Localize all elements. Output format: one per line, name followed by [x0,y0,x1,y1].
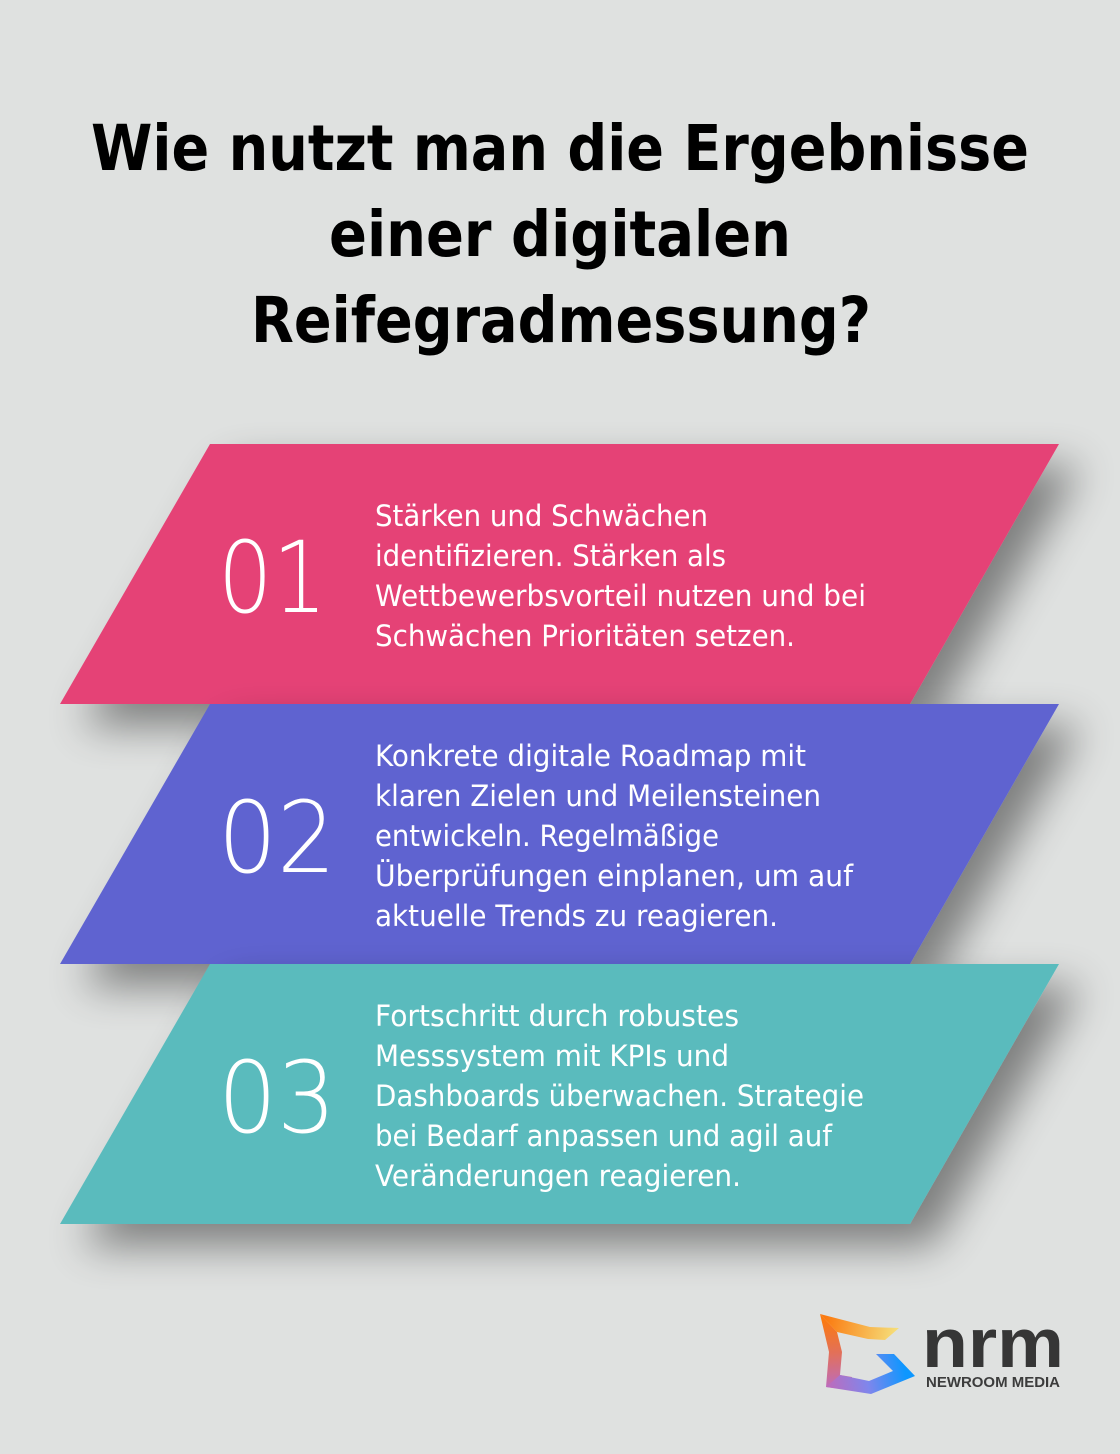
wordmark: nrm: nrm [922,1304,1064,1382]
panel: step 02 [60,704,1059,964]
parallelogram: step 01 [60,444,1059,704]
text block: step 02: entwickeln. Regelmäßige [375,819,719,853]
text block: step 03: Messsystem mit KPIs und [375,1039,729,1073]
text block: step 03: bei Bedarf anpassen und agil auf [375,1119,833,1153]
text block: step 01 [375,499,866,653]
text block: step 01: identifizieren. Stärken als [375,539,726,573]
text block: step 01: Schwächen Prioritäten setzen. [375,619,795,653]
number: 01: 01 [218,521,327,636]
title: einer digitalen [329,198,791,271]
title [91,112,1029,357]
text block: step 01: Wettbewerbsvorteil nutzen und bei [375,579,866,613]
panel: step 01 [60,444,1059,704]
logo: newroom media [820,1304,1064,1394]
panel: step 03 [60,964,1059,1224]
text block: step 01: Stärken und Schwächen [375,499,708,533]
number: 03: 03 [218,1041,336,1156]
text block: step 02: Überprüfungen einplanen, um auf [375,859,854,893]
text block: step 03: Veränderungen reagieren. [375,1159,741,1193]
text block: step 02: klaren Zielen und Meilensteinen [375,779,821,813]
title: Reifegradmessung? [251,284,871,357]
text block: step 03: Fortschritt durch robustes [375,999,739,1033]
text block: step 03 [375,999,864,1193]
text block: step 02 [375,739,854,933]
text block: step 02: Konkrete digitale Roadmap mit [375,739,806,773]
text block: step 03: Dashboards überwachen. Strategie [375,1079,864,1113]
wordmark: newroom media: NEWROOM MEDIA [926,1375,1061,1391]
parallelogram: step 02 [60,704,1059,964]
parallelogram: step 03 [60,964,1059,1224]
text block: step 02: aktuelle Trends zu reagieren. [375,899,778,933]
icon: logo mark [820,1314,915,1394]
number: 02: 02 [218,781,336,896]
